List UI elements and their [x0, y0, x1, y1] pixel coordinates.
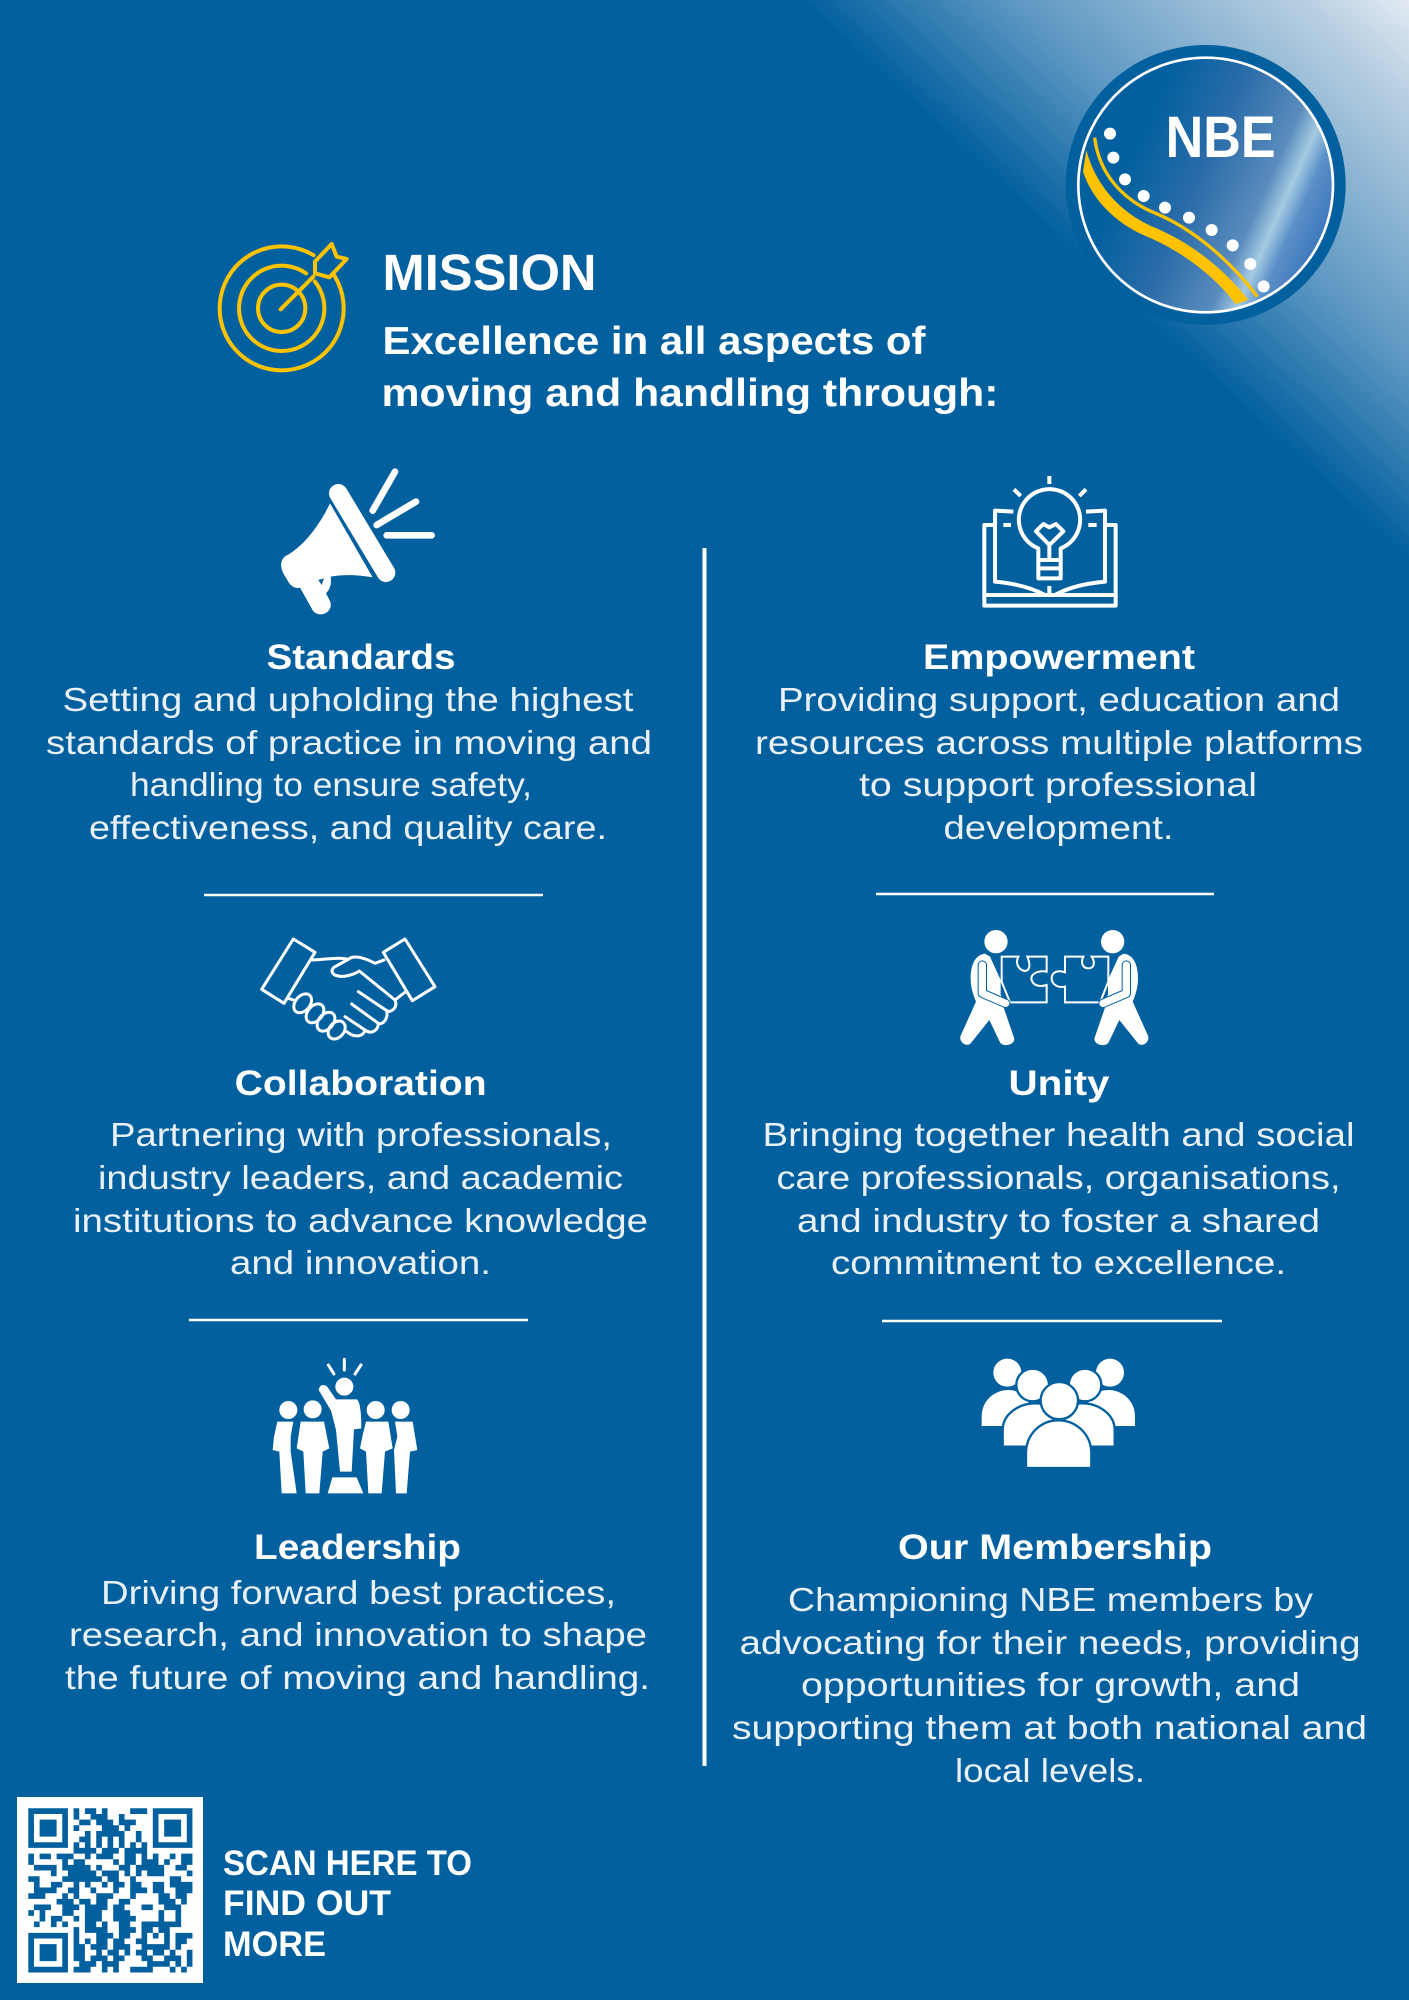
panel: our membership: advocating for their needs, providing	[740, 1624, 1360, 1661]
panel: leadership: Driving forward best practices,	[101, 1574, 616, 1611]
call to action: FIND OUT	[223, 1884, 391, 1923]
heading: mission	[382, 244, 998, 415]
icon: two people joining puzzle pieces	[960, 930, 1148, 1045]
panel: standards: Setting and upholding the highest	[62, 681, 634, 718]
panel: our membership	[732, 1359, 1367, 1789]
QR code	[17, 1797, 203, 1983]
call to action: SCAN HERE TO	[223, 1844, 472, 1883]
icon: light bulb over book	[984, 476, 1116, 606]
call to action	[223, 1844, 472, 1964]
icon: handshake	[262, 939, 435, 1042]
panel: standards: Standards	[266, 638, 456, 677]
panel: empowerment: to support professional	[859, 766, 1257, 803]
panel: unity: care professionals, organisations,	[776, 1159, 1340, 1196]
panel: standards	[46, 472, 652, 846]
panel: empowerment: resources across multiple platforms	[755, 724, 1363, 761]
panel: unity: and industry to foster a shared	[797, 1202, 1320, 1239]
icon: leader with team	[273, 1359, 417, 1493]
panel: our membership: Championing NBE members by	[788, 1581, 1314, 1618]
panel: leadership	[65, 1359, 650, 1696]
panel: collaboration: Partnering with professionals,	[110, 1116, 612, 1153]
panel: standards: standards of practice in moving and	[46, 724, 652, 761]
icon: target with arrow	[220, 244, 347, 370]
panel: empowerment: Empowerment	[923, 638, 1195, 677]
logo: NBE: NBE	[1166, 105, 1276, 170]
panel: collaboration: Collaboration	[235, 1064, 487, 1103]
panel: empowerment	[755, 476, 1363, 846]
panel: collaboration	[73, 939, 648, 1281]
panel: collaboration: institutions to advance knowledge	[73, 1202, 648, 1239]
icon: megaphone	[281, 472, 432, 614]
panel: our membership: Our Membership	[898, 1528, 1212, 1567]
call to action: MORE	[223, 1925, 326, 1964]
panel: empowerment: Providing support, education and	[778, 681, 1340, 718]
heading: mission: moving and handling through:	[382, 372, 998, 415]
panel: unity	[762, 930, 1354, 1281]
panel: unity: commitment to excellence.	[831, 1244, 1286, 1281]
icon: group of people	[982, 1359, 1135, 1468]
panel: standards: effectiveness, and quality care.	[89, 809, 607, 846]
panel: unity: Unity	[1008, 1064, 1110, 1103]
panel: unity: Bringing together health and social	[762, 1116, 1354, 1153]
panel: our membership: local levels.	[955, 1752, 1145, 1789]
panel: our membership: supporting them at both national and	[732, 1709, 1367, 1746]
panel: leadership: Leadership	[254, 1528, 461, 1567]
panel: collaboration: and innovation.	[230, 1244, 491, 1281]
logo: NBE	[1066, 45, 1346, 325]
panel: empowerment: development.	[944, 809, 1174, 846]
panel: leadership: the future of moving and handling.	[65, 1659, 650, 1696]
panel: collaboration: industry leaders, and academic	[98, 1159, 623, 1196]
panel: standards: handling to ensure safety,	[130, 766, 532, 803]
heading: mission: Excellence in all aspects of	[382, 320, 927, 363]
panel: leadership: research, and innovation to shape	[69, 1616, 647, 1653]
heading: mission: MISSION	[382, 244, 596, 301]
panel: our membership: opportunities for growth, and	[801, 1666, 1300, 1703]
